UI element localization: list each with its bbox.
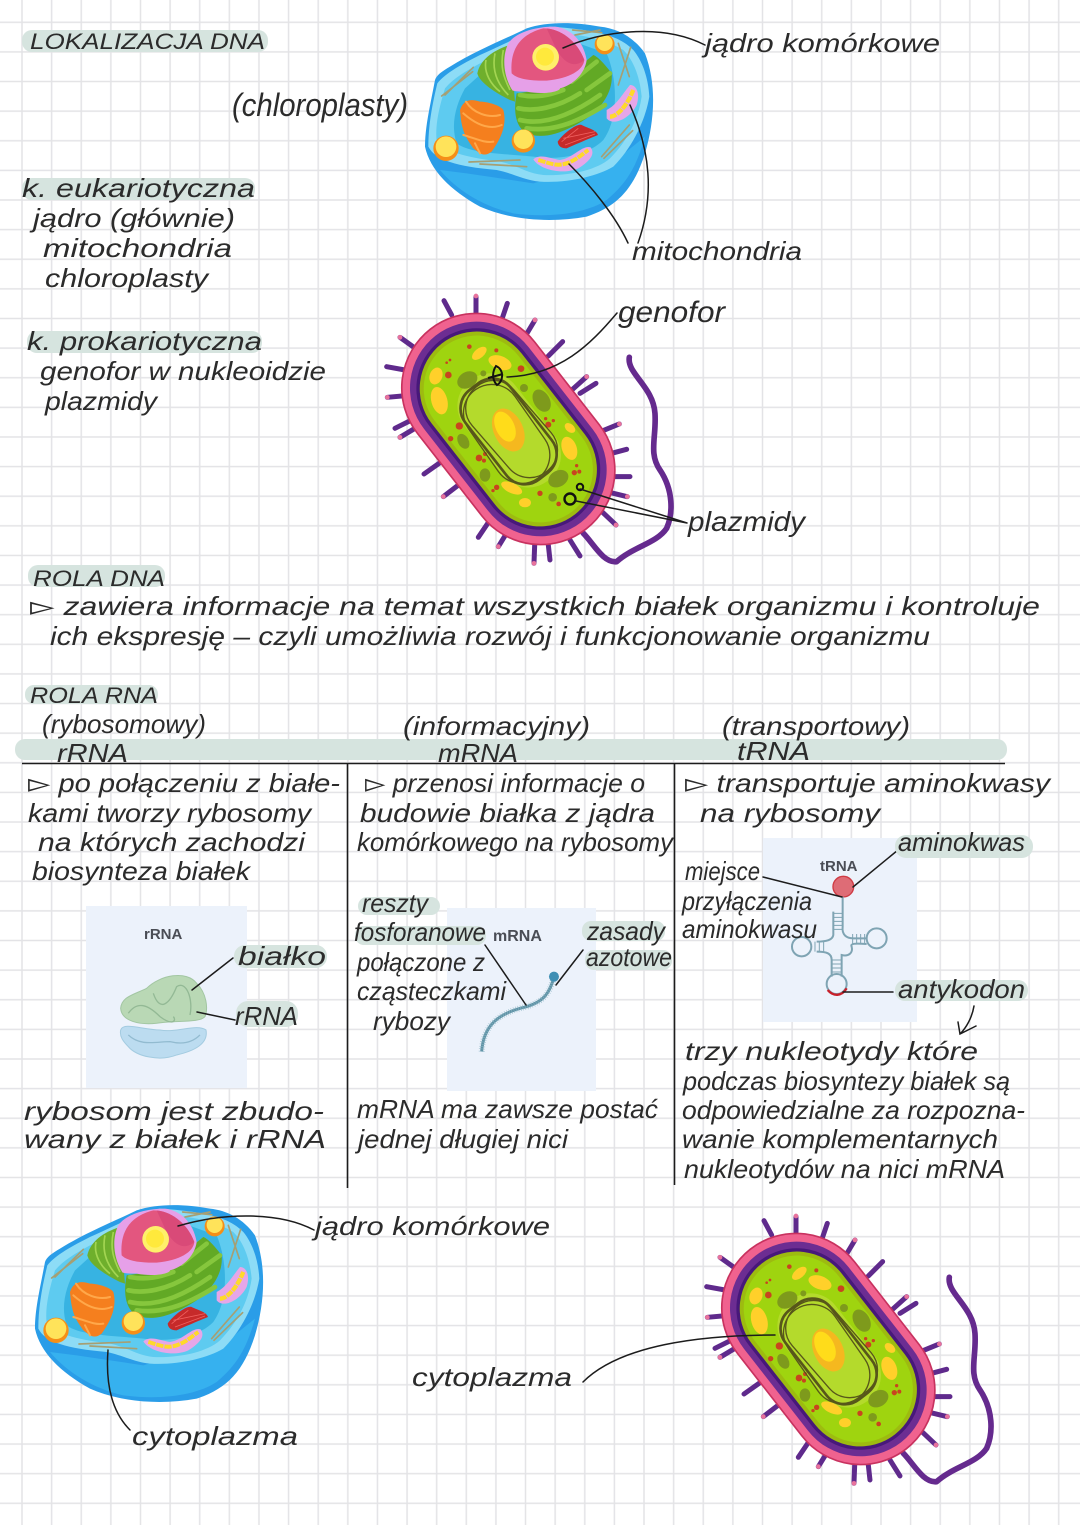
text block: komórka eukariotyczna: jądro (głównie) bbox=[29, 203, 235, 233]
text block: rybosom: rybosom jest zbudo- bbox=[24, 1096, 324, 1126]
text block: rybosom bbox=[24, 1096, 326, 1154]
column title: rRNA bbox=[42, 709, 206, 768]
label: plazmidy with leaders bbox=[564, 484, 807, 537]
heading: rola DNA: ROLA DNA bbox=[33, 566, 165, 591]
text block: antykodon description: trzy nukleotydy które bbox=[685, 1036, 978, 1066]
text block: mRNA description: budowie białka z jądra bbox=[360, 798, 655, 828]
column title: mRNA: (informacyjny) bbox=[403, 711, 590, 741]
label: jądro komórkowe, bottom bbox=[178, 1211, 550, 1241]
column title: tRNA: tRNA bbox=[737, 736, 810, 766]
text block: rola DNA: ich ekspresję – czyli umożliwia rozwój i funkcjonowanie organizmu bbox=[50, 621, 930, 651]
column title: tRNA: (transportowy) bbox=[722, 711, 910, 741]
heading: rola RNA: ROLA RNA bbox=[30, 683, 158, 708]
text block: rola DNA: ▻ zawiera informacje na temat wszystkich białek organizmu i kontroluje bbox=[30, 591, 1040, 621]
text block: komórka eukariotyczna: chloroplasty bbox=[45, 263, 210, 293]
label: reszty fosforanowe połączone z cząsteczkami rybozy: połączone z bbox=[356, 947, 485, 977]
text block: komórka prokariotyczna: genofor w nukleoidzie bbox=[40, 356, 326, 386]
label: reszty fosforanowe połączone z cząsteczkami rybozy: fosforanowe bbox=[354, 917, 486, 947]
text block: tRNA description: na rybosomy bbox=[700, 798, 882, 828]
heading: lokalizacja DNA: LOKALIZACJA DNA bbox=[30, 29, 265, 54]
diagram: rRNA ribosome bbox=[86, 906, 247, 1088]
label: mitochondria with leaders: mitochondria bbox=[632, 236, 802, 266]
text block: antykodon description bbox=[682, 1036, 1025, 1184]
label: mitochondria with leaders bbox=[569, 105, 802, 266]
note: chloroplasty: (chloroplasty) bbox=[232, 87, 408, 123]
illustration: bacterium, bottom bbox=[692, 1203, 991, 1495]
text block: rRNA description: biosynteza białek bbox=[32, 856, 252, 886]
diagram: tRNA cloverleaf: tRNA bbox=[820, 858, 858, 875]
label: cytoplazma, bottom left bbox=[107, 1350, 298, 1451]
label: jądro komórkowe, bottom: jądro komórkowe bbox=[311, 1211, 550, 1241]
text block: mRNA description: komórkowego na rybosomy bbox=[357, 827, 675, 857]
label: aminokwas bbox=[853, 827, 1033, 887]
text block: tRNA description bbox=[685, 768, 1052, 828]
label: reszty fosforanowe połączone z cząsteczkami rybozy: reszty bbox=[362, 888, 430, 918]
label: jądro komórkowe with leader bbox=[563, 28, 940, 58]
text block: antykodon description: wanie komplementarnych bbox=[682, 1124, 998, 1154]
arrow: antykodon to description bbox=[958, 1006, 976, 1034]
label: zasady azotowe bbox=[556, 916, 672, 985]
text block: antykodon description: odpowiedzialne za rozpozna- bbox=[682, 1095, 1025, 1125]
text block: antykodon description: podczas biosyntezy białek są bbox=[682, 1066, 1010, 1096]
table rules bbox=[22, 763, 1005, 1188]
text block: antykodon description: nukleotydów na nici mRNA bbox=[684, 1154, 1005, 1184]
column title: tRNA bbox=[722, 711, 910, 766]
label: genofor with leader bbox=[488, 296, 726, 385]
label: cytoplazma, bottom left: cytoplazma bbox=[132, 1421, 298, 1451]
text block: rRNA description: kami tworzy rybosomy bbox=[28, 798, 313, 828]
column title: mRNA: mRNA bbox=[438, 738, 518, 768]
label: rRNA bbox=[197, 1001, 298, 1031]
text block: mRNA postać: jednej długiej nici bbox=[355, 1124, 569, 1154]
text block: komórka eukariotyczna: mitochondria bbox=[43, 233, 232, 263]
table header band bbox=[15, 739, 1007, 760]
text block: mRNA description bbox=[357, 768, 675, 857]
text block: komórka prokariotyczna bbox=[27, 326, 326, 416]
text block: rRNA description: ▻ po połączeniu z białe- bbox=[28, 768, 340, 798]
diagram: rRNA ribosome: rRNA bbox=[144, 926, 183, 943]
column title: mRNA bbox=[403, 711, 590, 768]
label: reszty fosforanowe połączone z cząsteczkami rybozy: cząsteczkami bbox=[357, 976, 507, 1006]
label: zasady azotowe: zasady bbox=[586, 916, 667, 946]
label: miejsce przyłączenia aminokwasu: przyłączenia bbox=[681, 886, 812, 916]
illustration: bacterium bbox=[372, 283, 671, 575]
label: zasady azotowe: azotowe bbox=[586, 942, 672, 972]
label: jądro komórkowe with leader: jądro komórkowe bbox=[701, 28, 940, 58]
label: miejsce przyłączenia aminokwasu bbox=[681, 856, 842, 944]
column title: rRNA: (rybosomowy) bbox=[42, 709, 206, 739]
label: reszty fosforanowe połączone z cząsteczkami rybozy: rybozy bbox=[373, 1006, 452, 1036]
label: rRNA: rRNA bbox=[235, 1001, 298, 1031]
text block: komórka eukariotyczna: k. eukariotyczna bbox=[22, 173, 255, 203]
label: cytoplazma, bottom right bbox=[412, 1335, 775, 1392]
text block: rybosom: wany z białek i rRNA bbox=[24, 1124, 326, 1154]
illustration: eukaryotic cell bbox=[425, 23, 653, 220]
label: genofor with leader: genofor bbox=[618, 296, 726, 329]
label: cytoplazma, bottom right: cytoplazma bbox=[412, 1362, 572, 1392]
label: antykodon bbox=[843, 974, 1028, 1004]
diagram: mRNA strand bbox=[447, 908, 596, 1091]
label: miejsce przyłączenia aminokwasu: miejsce bbox=[685, 856, 760, 886]
label: antykodon: antykodon bbox=[898, 974, 1025, 1004]
text block: rola DNA bbox=[30, 591, 1040, 651]
text block: mRNA description: ▻ przenosi informacje o bbox=[365, 768, 645, 798]
text block: rRNA description bbox=[28, 768, 340, 886]
text block: rRNA description: na których zachodzi bbox=[38, 827, 306, 857]
label: białko: białko bbox=[238, 941, 326, 971]
text block: komórka eukariotyczna bbox=[22, 173, 255, 293]
text block: mRNA postać: mRNA ma zawsze postać bbox=[357, 1094, 658, 1124]
illustration: eukaryotic cell, bottom bbox=[35, 1205, 263, 1402]
label: plazmidy with leaders: plazmidy bbox=[687, 506, 807, 537]
label: reszty fosforanowe połączone z cząsteczkami rybozy bbox=[354, 888, 526, 1036]
text block: mRNA postać bbox=[355, 1094, 658, 1154]
label: aminokwas: aminokwas bbox=[898, 827, 1025, 857]
diagram: mRNA strand: mRNA bbox=[493, 928, 542, 945]
column title: rRNA: rRNA bbox=[57, 738, 128, 768]
text block: komórka prokariotyczna: k. prokariotyczna bbox=[27, 326, 262, 356]
label: białko bbox=[192, 941, 327, 990]
label: miejsce przyłączenia aminokwasu: aminokwasu bbox=[682, 914, 817, 944]
diagram: tRNA cloverleaf bbox=[763, 838, 917, 1022]
text block: tRNA description: ▻ transportuje aminokwasy bbox=[685, 768, 1052, 798]
text block: komórka prokariotyczna: plazmidy bbox=[44, 386, 159, 416]
